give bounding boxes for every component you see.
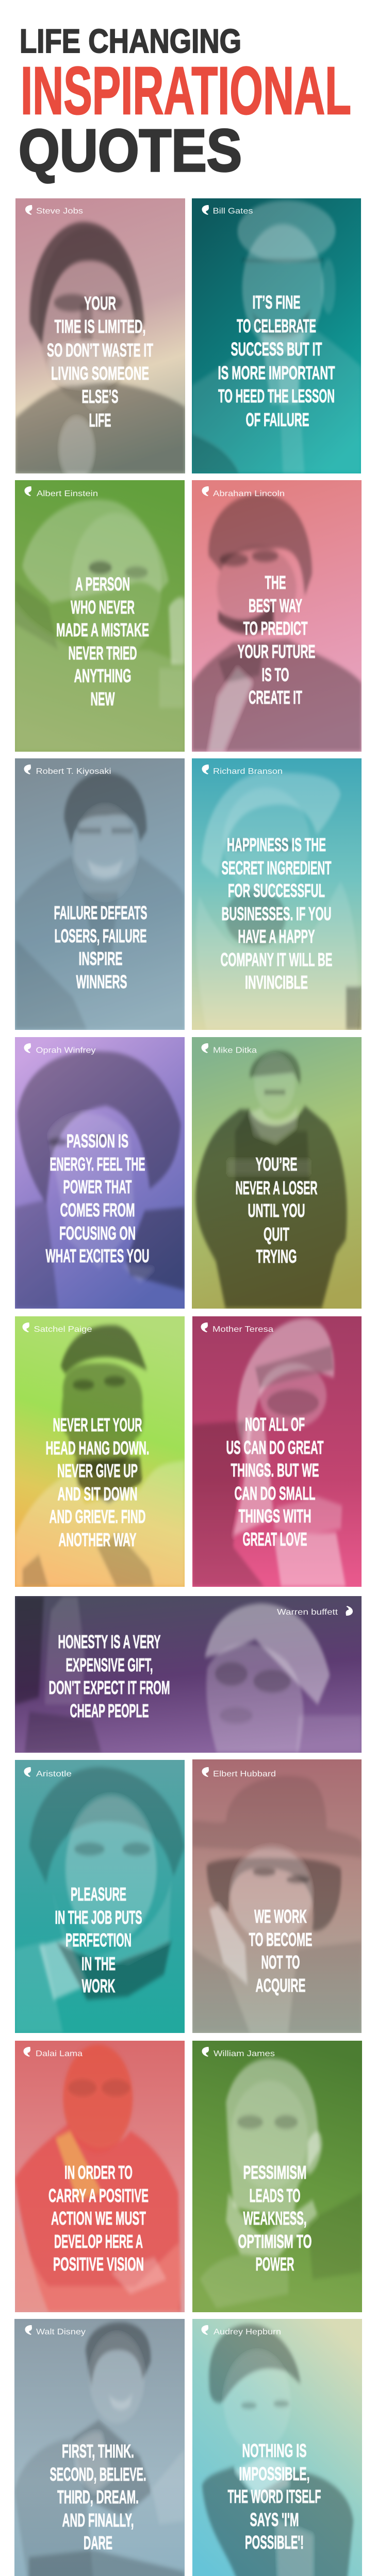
quote text: OPTIMISM TO bbox=[238, 2231, 312, 2252]
panel: Robert T. Kiyosaki bbox=[15, 758, 185, 1030]
panel: William James bbox=[192, 2041, 362, 2312]
portrait: Richard Branson bbox=[192, 758, 362, 1030]
panel: Steve Jobs bbox=[15, 198, 185, 481]
quote text: WORK bbox=[81, 1975, 116, 1996]
quote text: IN THE bbox=[81, 1953, 116, 1974]
portrait: Warren Buffett bbox=[15, 1596, 362, 1753]
quote text: NOTHING IS bbox=[242, 2440, 306, 2461]
quote text: BEST WAY bbox=[249, 595, 302, 616]
quote text: CARRY A POSITIVE bbox=[48, 2185, 149, 2206]
portrait: Robert T. Kiyosaki bbox=[15, 758, 185, 1030]
portrait: Bill Gates bbox=[192, 198, 361, 473]
quote text: LIFE bbox=[89, 410, 111, 431]
quote text: YOU’RE bbox=[256, 1154, 297, 1175]
quote text: UNTIL YOU bbox=[248, 1200, 305, 1221]
quote text: PASSION IS bbox=[67, 1130, 128, 1151]
panel: Oprah Winfrey bbox=[15, 1037, 185, 1309]
author: Albert Einstein: Albert Einstein bbox=[37, 489, 98, 498]
quote text: PESSIMISM bbox=[243, 2162, 306, 2183]
quote text: NOT ALL OF bbox=[245, 1414, 305, 1435]
author: Steve Jobs: Steve Jobs bbox=[36, 207, 83, 215]
quote text: TRYING bbox=[256, 1246, 297, 1267]
author: William James bbox=[202, 2047, 275, 2058]
quote text: HONESTY IS A VERY bbox=[58, 1631, 161, 1652]
author: Warren Buffett bbox=[277, 1606, 353, 1617]
portrait: Audrey Hepburn bbox=[192, 2319, 362, 2576]
portrait: Abraham Lincoln bbox=[192, 480, 362, 752]
author: Audrey Hepburn bbox=[201, 2325, 281, 2336]
quote text: OF FAILURE bbox=[245, 409, 309, 430]
quote text bbox=[221, 834, 332, 993]
quote text: HAVE A HAPPY bbox=[238, 926, 315, 947]
author: Richard Branson: Richard Branson bbox=[213, 767, 283, 776]
quote text: WINNERS bbox=[76, 971, 127, 992]
panel: Abraham Lincoln bbox=[192, 480, 362, 752]
quote text: AND GRIEVE. FIND bbox=[50, 1506, 145, 1527]
quote text: SECOND, BELIEVE. bbox=[50, 2464, 146, 2485]
quote text: FAILURE DEFEATS bbox=[54, 902, 147, 923]
panel: Audrey Hepburn bbox=[192, 2319, 362, 2576]
quote text: DARE bbox=[84, 2532, 112, 2553]
quote text: THIRD, DREAM. bbox=[57, 2486, 139, 2507]
quote text: PLEASURE bbox=[71, 1884, 126, 1905]
quote text: FIRST, THINK. bbox=[62, 2441, 134, 2462]
quote text: ACTION WE MUST bbox=[51, 2208, 146, 2229]
author: Bill Gates: Bill Gates bbox=[212, 207, 253, 215]
author: Mother Teresa bbox=[201, 1323, 273, 1334]
quote text: TO PREDICT bbox=[243, 618, 308, 639]
quote text: NEVER TRIED bbox=[68, 642, 137, 664]
quote text: IN ORDER TO bbox=[64, 2162, 133, 2183]
panel: Albert Einstein bbox=[15, 480, 185, 752]
author: Warren Buffett: Warren buffett bbox=[277, 1608, 338, 1617]
author: Satchel Paige: Satchel Paige bbox=[34, 1325, 92, 1334]
quote text: SO DON’T WASTE IT bbox=[47, 340, 153, 361]
quote text: A PERSON bbox=[75, 573, 130, 595]
quote text bbox=[55, 1884, 142, 1996]
quote text: WEAKNESS, bbox=[243, 2208, 306, 2229]
quote text: QUIT bbox=[264, 1224, 289, 1245]
quote text: ENERGY. FEEL THE bbox=[50, 1154, 145, 1175]
quote text: POSSIBLE'! bbox=[245, 2532, 304, 2553]
portrait: Aristotle bbox=[15, 1760, 185, 2033]
quote text bbox=[226, 1414, 324, 1550]
panel: Dalai Lama bbox=[15, 2041, 185, 2312]
quote text bbox=[45, 1130, 150, 1266]
quote text: THINGS WITH bbox=[238, 1505, 312, 1527]
portrait: Albert Einstein bbox=[15, 480, 185, 752]
author: Bill Gates bbox=[202, 205, 253, 215]
quote text: ANOTHER WAY bbox=[59, 1529, 136, 1550]
portrait: William James bbox=[192, 2041, 362, 2312]
author: Robert T. Kiyosaki: Robert T. Kiyosaki bbox=[36, 767, 111, 776]
quote text bbox=[45, 1414, 150, 1550]
quote text: LEADS TO bbox=[250, 2185, 300, 2206]
quote text: NEVER GIVE UP bbox=[57, 1460, 138, 1481]
author: Albert Einstein bbox=[25, 486, 98, 498]
author: Dalai Lama bbox=[24, 2047, 83, 2058]
author: Oprah Winfrey bbox=[24, 1043, 96, 1055]
author: Aristotle bbox=[24, 1767, 72, 1778]
quote text: WHAT EXCITES YOU bbox=[45, 1245, 150, 1266]
quote text bbox=[47, 293, 153, 431]
author: Oprah Winfrey: Oprah Winfrey bbox=[36, 1046, 96, 1055]
portrait: Dalai Lama bbox=[15, 2041, 185, 2312]
quote text: DEVELOP HERE A bbox=[54, 2231, 143, 2252]
quote text bbox=[56, 573, 149, 709]
panel: Mother Teresa bbox=[192, 1316, 362, 1587]
quote text bbox=[235, 1154, 318, 1267]
author: Satchel Paige bbox=[23, 1323, 92, 1334]
quote text bbox=[48, 1631, 170, 1721]
panel: Richard Branson bbox=[192, 758, 362, 1030]
quote text: YOUR FUTURE bbox=[237, 641, 316, 662]
panel: Satchel Paige bbox=[15, 1316, 185, 1587]
quote text: TO CELEBRATE bbox=[237, 315, 316, 336]
author: Walt Disney: Walt Disney bbox=[36, 2328, 86, 2336]
author: Abraham Lincoln: Abraham Lincoln bbox=[213, 489, 285, 498]
quote text: IS TO bbox=[262, 664, 289, 685]
quote text: LOSERS, FAILURE bbox=[55, 925, 146, 946]
quote text bbox=[237, 572, 316, 708]
quote text: TIME IS LIMITED, bbox=[55, 316, 145, 337]
portrait: Elbert Hubbard bbox=[192, 1759, 362, 2033]
panel: Aristotle bbox=[15, 1760, 185, 2033]
quote text: ACQUIRE bbox=[256, 1975, 305, 1996]
author: Elbert Hubbard bbox=[202, 1767, 276, 1778]
quote text: INSPIRE bbox=[78, 948, 123, 969]
quote text: ANYTHING bbox=[74, 665, 131, 686]
quote text bbox=[238, 2162, 312, 2275]
quote text: DON'T EXPECT IT FROM bbox=[48, 1677, 170, 1698]
quote text bbox=[48, 2162, 149, 2275]
panel: Bill Gates bbox=[192, 198, 361, 473]
author: William James: William James bbox=[214, 2049, 275, 2058]
title line: quotes: QUOTES bbox=[19, 117, 242, 184]
author: Audrey Hepburn: Audrey Hepburn bbox=[214, 2328, 281, 2336]
author: Robert T. Kiyosaki bbox=[24, 765, 111, 776]
quote text: IT’S FINE bbox=[253, 292, 300, 313]
quote text: LIVING SOMEONE bbox=[51, 363, 149, 384]
quote text bbox=[228, 2440, 321, 2553]
portrait: Oprah Winfrey bbox=[15, 1037, 185, 1309]
author: Walt Disney bbox=[25, 2325, 86, 2336]
portrait: Satchel Paige bbox=[15, 1316, 185, 1587]
quote text: NOT TO bbox=[261, 1952, 300, 1973]
portrait: Mike Ditka bbox=[192, 1037, 362, 1309]
quote text: AND SIT DOWN bbox=[58, 1483, 137, 1504]
quote text: POSITIVE VISION bbox=[53, 2253, 144, 2275]
quote text: NEW bbox=[91, 688, 115, 709]
quote text bbox=[50, 2441, 146, 2553]
quote text: HEAD HANG DOWN. bbox=[45, 1437, 150, 1459]
quote text: IMPOSSIBLE, bbox=[239, 2463, 309, 2484]
author: Mother Teresa: Mother Teresa bbox=[212, 1325, 273, 1334]
portrait: Walt Disney bbox=[14, 2319, 185, 2576]
title bbox=[19, 22, 351, 184]
quote text: CREATE IT bbox=[249, 687, 302, 708]
quote text: CAN DO SMALL bbox=[234, 1483, 316, 1504]
portrait: Mother Teresa bbox=[192, 1316, 362, 1587]
quote text: GREAT LOVE bbox=[242, 1529, 307, 1550]
quote text: YOUR bbox=[84, 293, 116, 314]
quote text: POWER THAT bbox=[63, 1176, 132, 1197]
quote text: PERFECTION bbox=[65, 1929, 132, 1951]
quote text bbox=[54, 902, 147, 992]
panel: Warren Buffett bbox=[15, 1596, 362, 1753]
quote text: FOCUSING ON bbox=[59, 1223, 136, 1244]
quote text: EXPENSIVE GIFT, bbox=[66, 1654, 153, 1675]
quote text: NEVER LET YOUR bbox=[53, 1414, 142, 1435]
quote text: POWER bbox=[256, 2253, 294, 2275]
author: Elbert Hubbard: Elbert Hubbard bbox=[213, 1770, 276, 1778]
quote text: WHO NEVER bbox=[71, 597, 135, 618]
quote text: AND FINALLY, bbox=[62, 2510, 134, 2531]
panel: Elbert Hubbard bbox=[192, 1759, 362, 2033]
panel: Mike Ditka bbox=[192, 1037, 362, 1309]
quote text: MADE A MISTAKE bbox=[56, 619, 149, 640]
author: Abraham Lincoln bbox=[202, 486, 285, 498]
author: Steve Jobs bbox=[25, 205, 83, 215]
author: Mike Ditka: Mike Ditka bbox=[213, 1046, 257, 1055]
author: Dalai Lama: Dalai Lama bbox=[36, 2049, 83, 2058]
quote text bbox=[218, 292, 335, 430]
quote text: SAYS 'I'M bbox=[250, 2509, 299, 2530]
author: Richard Branson bbox=[202, 765, 283, 776]
title line: life changing: LIFE CHANGING bbox=[20, 22, 241, 60]
quote text: TO BECOME bbox=[249, 1929, 313, 1950]
author: Mike Ditka bbox=[201, 1043, 257, 1055]
quote text bbox=[249, 1906, 313, 1996]
quote text: INVINCIBLE bbox=[245, 972, 308, 993]
quote text: CHEAP PEOPLE bbox=[70, 1700, 149, 1721]
quote text: THE bbox=[265, 572, 286, 593]
portrait: Steve Jobs bbox=[15, 198, 185, 473]
quote text: ELSE’S bbox=[81, 386, 119, 407]
author: Aristotle: Aristotle bbox=[36, 1770, 72, 1778]
panel: Walt Disney bbox=[14, 2319, 185, 2576]
quote text: WE WORK bbox=[254, 1906, 307, 1927]
quote text: COMES FROM bbox=[60, 1199, 135, 1221]
quote text: IN THE JOB PUTS bbox=[55, 1907, 142, 1928]
